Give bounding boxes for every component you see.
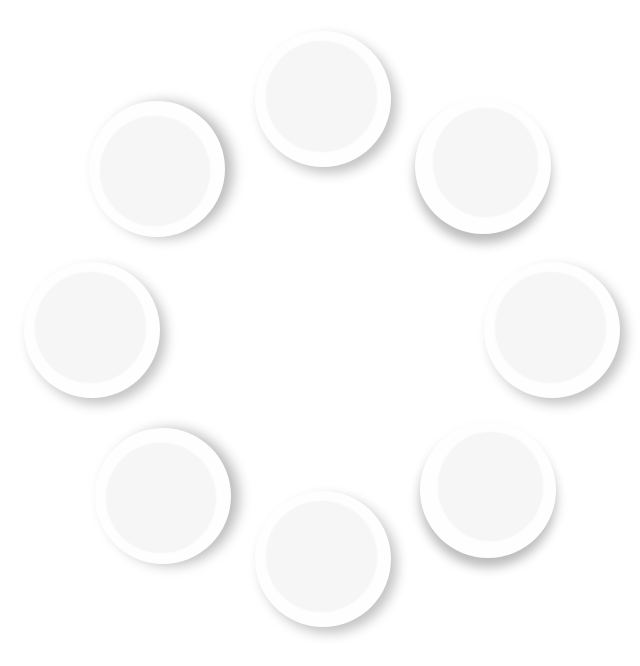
circle: upper left [89, 101, 225, 237]
circle: top [255, 31, 391, 167]
circle: right [484, 262, 620, 398]
circle: left [24, 262, 160, 398]
circle: bottom [255, 491, 391, 627]
circle: lower right [420, 422, 556, 558]
circle: upper right [415, 98, 551, 234]
circle: lower left [95, 428, 231, 564]
